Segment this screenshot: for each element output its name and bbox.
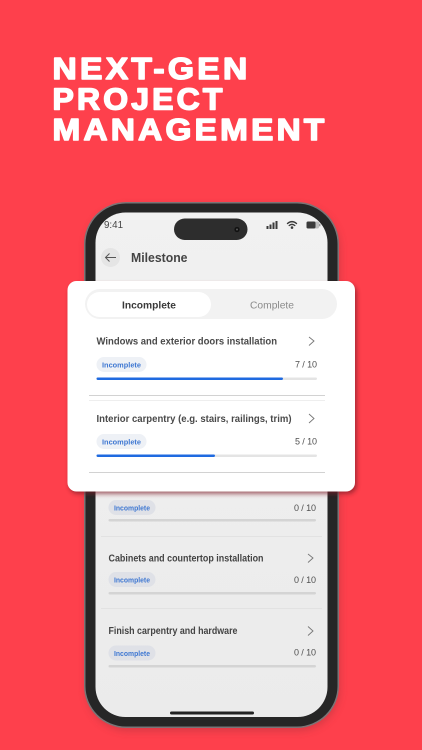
list item: finish carpentry: Incomplete xyxy=(114,649,150,658)
home indicator xyxy=(170,712,254,714)
title: PROJECT xyxy=(52,82,226,116)
dynamic island xyxy=(174,218,248,240)
status time: 9:41 xyxy=(104,219,123,231)
phone frame xyxy=(84,202,339,728)
list item: interior carpentry xyxy=(89,414,325,473)
phone screen xyxy=(96,212,328,717)
list item: cabinets: 0 / 10 xyxy=(294,575,316,585)
tab control: Complete xyxy=(250,300,294,312)
list item: windows and doors xyxy=(89,336,325,401)
card shadow xyxy=(69,284,357,494)
screen heading: Milestone xyxy=(131,251,188,265)
list item: finish carpentry xyxy=(108,626,316,668)
back button xyxy=(101,248,120,267)
title xyxy=(52,52,328,147)
icon: wifi xyxy=(288,222,296,228)
list item: windows and doors: Windows and exterior doors installation xyxy=(96,336,277,348)
list item: windows and doors: Incomplete xyxy=(102,360,141,370)
list item: interior carpentry: Incomplete xyxy=(102,438,141,446)
list item: finish carpentry: 0 / 10 xyxy=(294,648,316,658)
list item: interior carpentry: 5 / 10 xyxy=(295,436,317,446)
list item: interior carpentry: Interior carpentry (e.g. stairs, railings, trim) xyxy=(96,414,292,425)
panel: milestone card xyxy=(68,281,357,494)
list item: hidden row xyxy=(101,500,322,537)
tab control: Incomplete xyxy=(122,300,176,312)
card surface xyxy=(68,281,355,492)
list item: hidden row: 0 / 10 xyxy=(294,503,316,513)
icon: signal xyxy=(266,221,278,229)
title: NEXT-GEN xyxy=(52,52,251,86)
tab control xyxy=(85,289,337,319)
list item: cabinets xyxy=(101,554,322,609)
title: MANAGEMENT xyxy=(52,113,328,147)
list item: windows and doors: 7 / 10 xyxy=(295,360,317,370)
phone xyxy=(84,202,340,731)
list item: cabinets: Incomplete xyxy=(114,576,150,584)
icon: battery xyxy=(306,222,320,228)
list item: hidden row: Incomplete xyxy=(114,504,150,512)
list item: cabinets: Cabinets and countertop installation xyxy=(108,554,264,564)
list item: finish carpentry: Finish carpentry and hardware xyxy=(108,626,238,637)
phone shadow xyxy=(86,206,340,731)
